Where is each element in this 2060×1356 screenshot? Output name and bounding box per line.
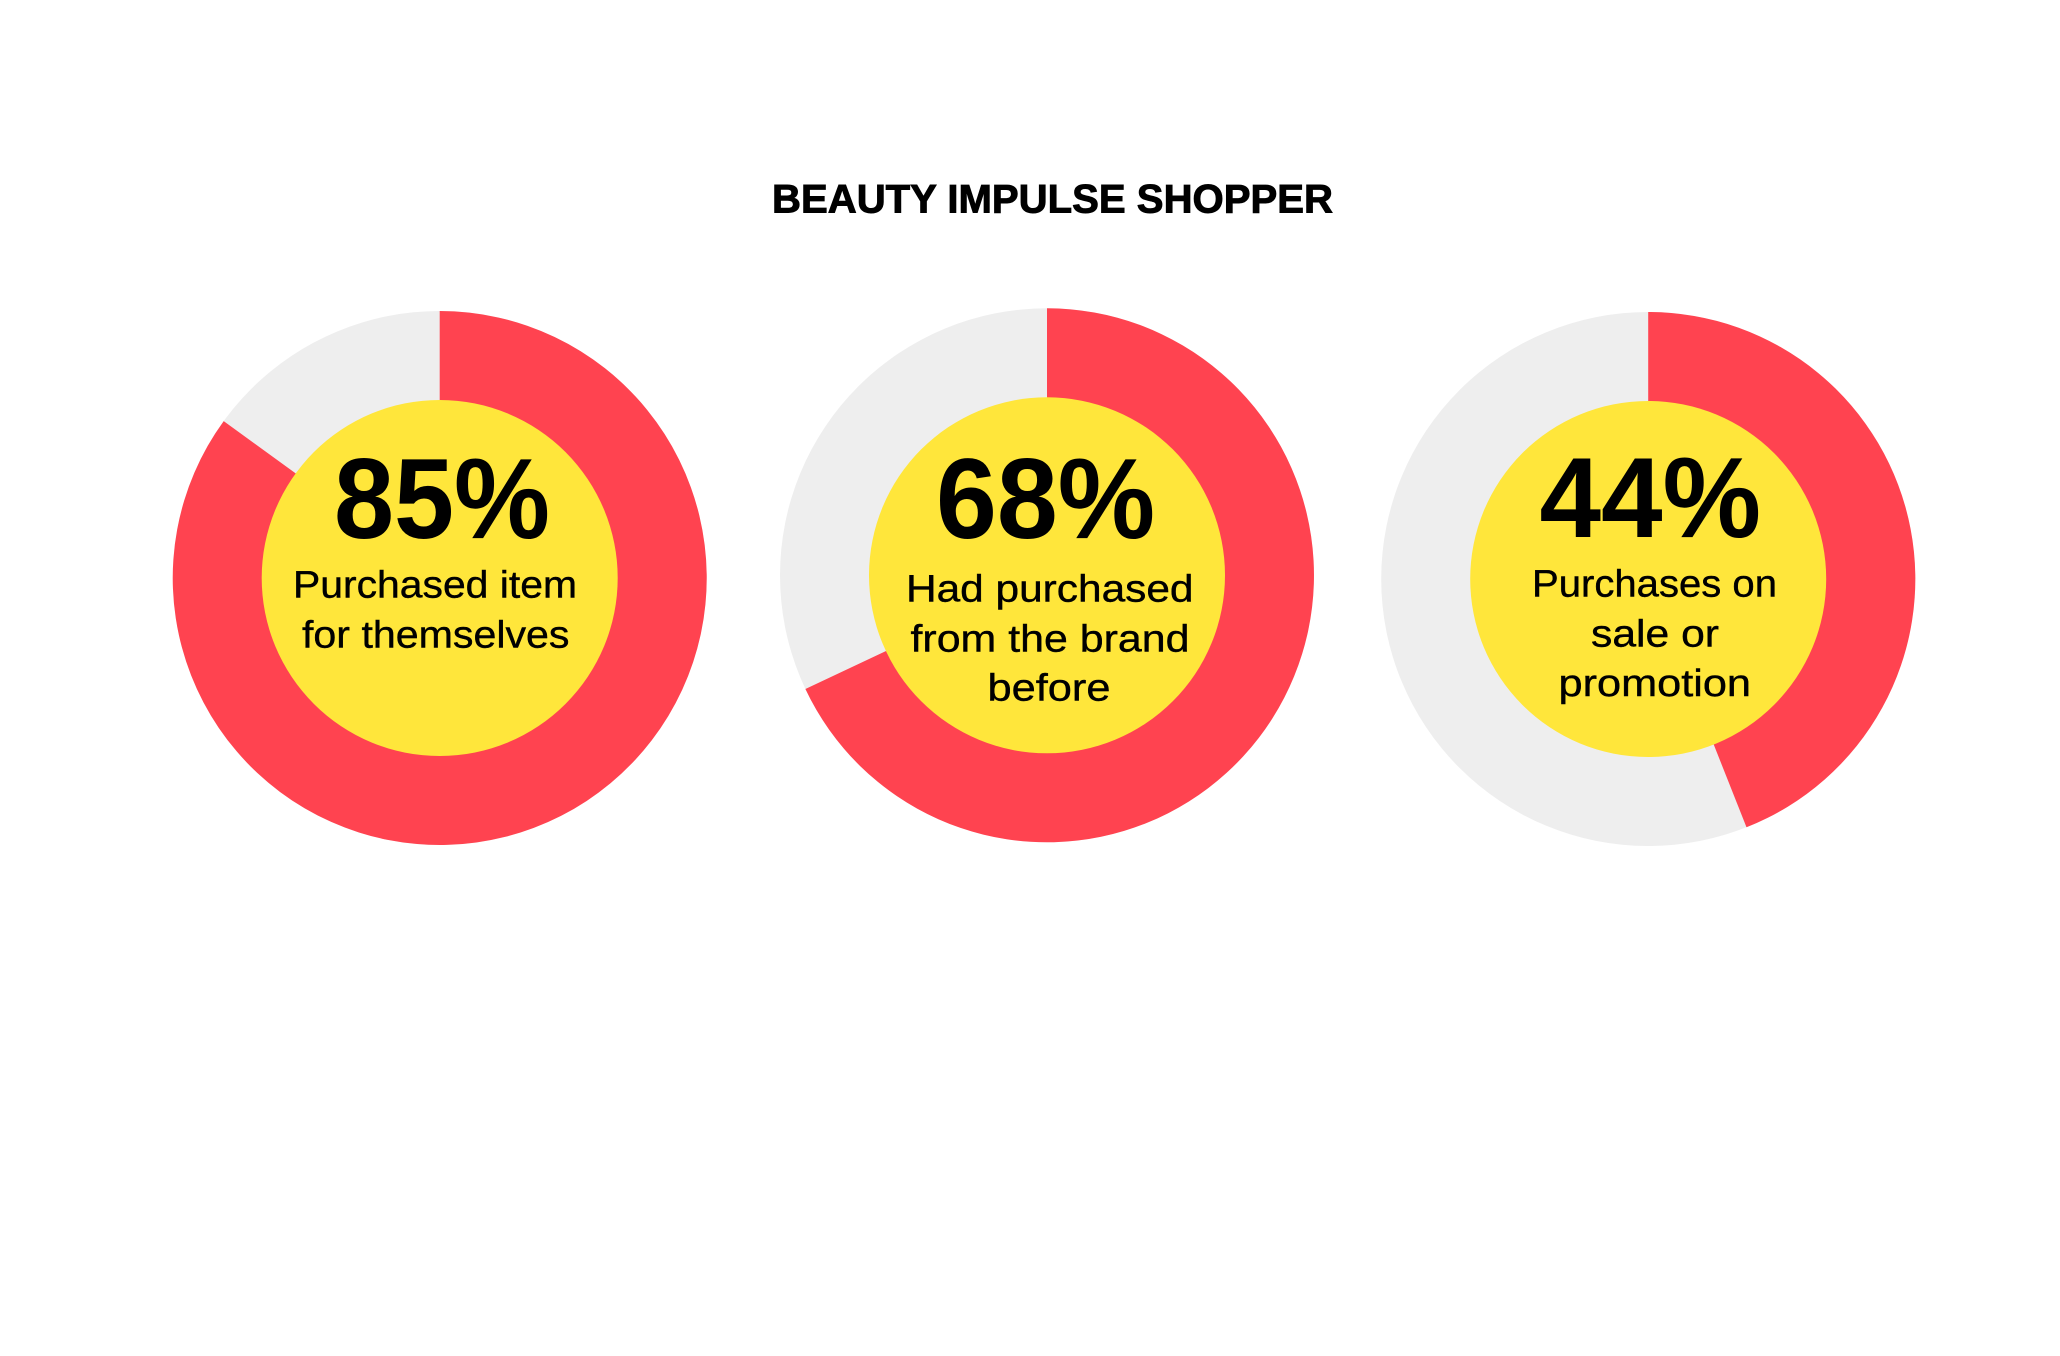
label: from the brand: [910, 619, 1190, 661]
donut track: [173, 311, 707, 845]
value 68%: 68%: [936, 436, 1155, 563]
donut track: [1381, 312, 1915, 846]
label: promotion: [1558, 663, 1751, 705]
donut value 68%: [805, 308, 1314, 842]
value 85%: 85%: [334, 436, 550, 563]
label: before: [988, 668, 1110, 710]
label: Purchases on: [1532, 564, 1777, 606]
label: Purchased item: [293, 565, 577, 607]
donut value 85%: [173, 311, 707, 845]
value 44%: 44%: [1540, 435, 1761, 562]
label: Had purchased: [906, 569, 1194, 611]
label: sale or: [1591, 614, 1719, 656]
center circle: [869, 397, 1225, 753]
center circle: [1470, 401, 1826, 757]
label: for themselves: [302, 615, 570, 657]
label: [293, 565, 577, 657]
label: [906, 569, 1194, 710]
center circle: [262, 400, 618, 756]
title: BEAUTY IMPULSE SHOPPER: [772, 178, 1333, 222]
panel: 85% donut: [173, 311, 707, 845]
panel: 44% donut: [1381, 312, 1915, 846]
panel: 68% donut: [780, 308, 1314, 842]
donut value 44%: [1648, 312, 1915, 827]
donut track: [780, 308, 1314, 842]
label: [1532, 564, 1777, 705]
